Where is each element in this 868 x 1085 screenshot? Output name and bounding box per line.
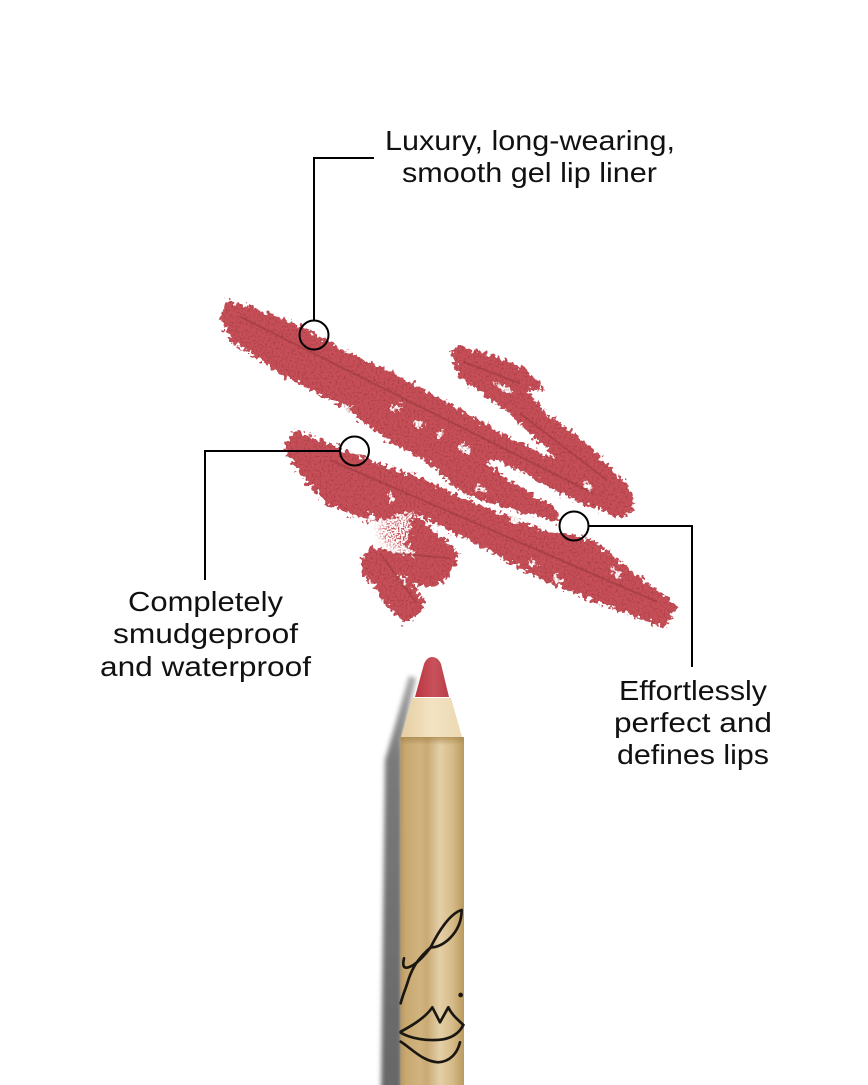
marker ring bbox=[340, 436, 369, 466]
label: smooth gel lip liner bbox=[402, 157, 657, 188]
connector line bbox=[205, 451, 340, 580]
stippled powder patch bbox=[380, 512, 430, 552]
label: Completely bbox=[128, 586, 283, 617]
signature and lips logo bbox=[401, 910, 463, 1062]
label: Luxury, long-wearing, bbox=[385, 125, 675, 156]
small return stroke bbox=[451, 345, 634, 508]
lead tip bbox=[415, 657, 449, 697]
label: perfect and bbox=[614, 707, 772, 738]
white flecks bbox=[343, 382, 622, 585]
upper long stroke with middle band bbox=[220, 301, 634, 523]
pencil shadow bbox=[381, 676, 416, 1085]
marker ring bbox=[300, 320, 328, 350]
swatch body bbox=[220, 301, 677, 628]
callout: smudgeproof and waterproof bbox=[100, 436, 369, 682]
label: defines lips bbox=[617, 739, 769, 770]
connector patch bbox=[407, 513, 460, 557]
connector line bbox=[314, 158, 374, 320]
barrel top shading bbox=[400, 737, 464, 745]
connector line bbox=[589, 526, 692, 667]
short check stroke bbox=[362, 547, 460, 623]
label: Effortlessly bbox=[619, 675, 767, 706]
pencil bbox=[381, 657, 464, 1085]
label: and waterproof bbox=[100, 651, 311, 682]
marker ring bbox=[560, 512, 588, 540]
darker pressure lines bbox=[240, 317, 657, 603]
label: smudgeproof bbox=[113, 618, 298, 649]
lipstick swatch strokes bbox=[220, 301, 677, 628]
callout: long-wearing gel liner bbox=[300, 125, 683, 350]
callout: defines lips bbox=[560, 512, 780, 770]
gold barrel bbox=[400, 737, 464, 1085]
wood cone bbox=[401, 698, 462, 737]
lower long stroke bbox=[284, 430, 677, 628]
